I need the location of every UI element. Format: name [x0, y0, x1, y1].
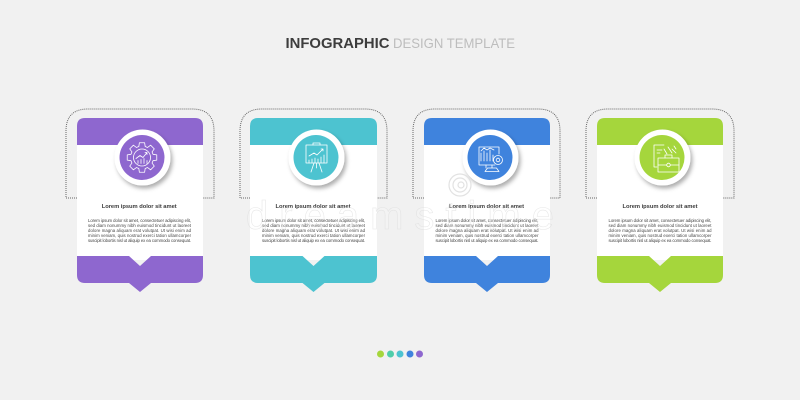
icon badge 4 [634, 130, 690, 186]
card text 2: suscipit lobortis nisl ut aliquip ex ea commodo consequat. [262, 238, 365, 243]
watermark spiral [449, 174, 471, 196]
card heading 3: Lorem ipsum dolor sit amet [449, 204, 524, 210]
watermark [246, 174, 554, 238]
footer band with pointer 4 [597, 256, 723, 292]
icon badge 2 [288, 130, 344, 186]
card text 3: dolore magna aliquam erat volutpat. Ut wisi enim ad [436, 228, 539, 233]
title: DESIGN TEMPLATE [393, 35, 515, 51]
card text 3: sed diam nonummy nibh euismod tincidunt ut laoreet [436, 223, 539, 228]
card text 3 [436, 218, 539, 243]
panel: card 2 teal [240, 109, 387, 292]
card text 4: Lorem ipsum dolor sit amet, consectetuer adipiscing elit, [608, 218, 712, 223]
card text 2: sed diam nonummy nibh euismod tincidunt ut laoreet [262, 223, 366, 228]
icon badge 3 [462, 130, 518, 186]
footer band with pointer 1 [77, 256, 203, 292]
card text 1: sed diam nonummy nibh euismod tincidunt ut laoreet [88, 223, 192, 228]
panel: card 4 green [586, 109, 734, 292]
card body 4 [597, 140, 723, 260]
card body 3 [424, 140, 550, 260]
card text 1: suscipit lobortis nisl ut aliquip ex ea commodo consequat. [88, 238, 191, 243]
card text 1: minim veniam, quis nostrud exerci tation ullamcorper [88, 233, 192, 238]
footer band with pointer 2 [250, 256, 377, 292]
dotted outline 1 [66, 109, 214, 198]
dotted outline 3 [413, 109, 560, 198]
card text 3: suscipit lobortis nisl ut aliquip ex ea commodo consequat. [436, 238, 538, 243]
icon badge 1 [114, 130, 170, 186]
icon: presentation board [306, 143, 327, 172]
card heading 2: Lorem ipsum dolor sit amet [276, 204, 351, 210]
panel: card 1 purple [66, 109, 214, 292]
header band 3 [424, 118, 550, 145]
card text 1 [88, 218, 192, 243]
card text 3: Lorem ipsum dolor sit amet, consectetuer adipiscing elit, [436, 218, 538, 223]
card heading 4: Lorem ipsum dolor sit amet [622, 204, 698, 210]
icon: document and briefcase [654, 145, 679, 172]
pagination dots [377, 350, 423, 358]
card text 1: dolore magna aliquam erat volutpat. Ut wisi enim ad [88, 228, 192, 233]
card heading 1: Lorem ipsum dolor sit amet [102, 204, 177, 210]
footer band with pointer 3 [424, 256, 550, 292]
card text 3: minim veniam, quis nostrud exerci tation ullamcorper [436, 233, 539, 238]
icon: monitor with charts [479, 147, 502, 172]
card body 1 [77, 140, 203, 260]
card text 1: Lorem ipsum dolor sit amet, consectetuer adipiscing elit, [88, 218, 191, 223]
header band 4 [597, 118, 723, 145]
title [286, 35, 515, 52]
card text 2: minim veniam, quis nostrud exerci tation ullamcorper [262, 233, 366, 238]
watermark: dreamstime [246, 194, 554, 238]
icon: gear with chart [127, 143, 157, 172]
card text 2 [262, 218, 366, 243]
card text 2: Lorem ipsum dolor sit amet, consectetuer adipiscing elit, [262, 218, 365, 223]
header band 1 [77, 118, 203, 145]
dotted outline 2 [240, 109, 387, 198]
card text 4: suscipit lobortis nisl ut aliquip ex ea commodo consequat. [608, 238, 712, 243]
panel: card 3 blue [413, 109, 560, 292]
card text 4: minim veniam, quis nostrud exerci tation ullamcorper [608, 233, 712, 238]
card text 4: sed diam nonummy nibh euismod tincidunt ut laoreet [608, 223, 712, 228]
header band 2 [250, 118, 377, 145]
card body 2 [250, 140, 377, 260]
title: INFOGRAPHIC [286, 35, 390, 52]
dotted outline 4 [586, 109, 734, 198]
card text 4 [608, 218, 712, 243]
card text 4: dolore magna aliquam erat volutpat. Ut wisi enim ad [608, 228, 712, 233]
card text 2: dolore magna aliquam erat volutpat. Ut wisi enim ad [262, 228, 366, 233]
